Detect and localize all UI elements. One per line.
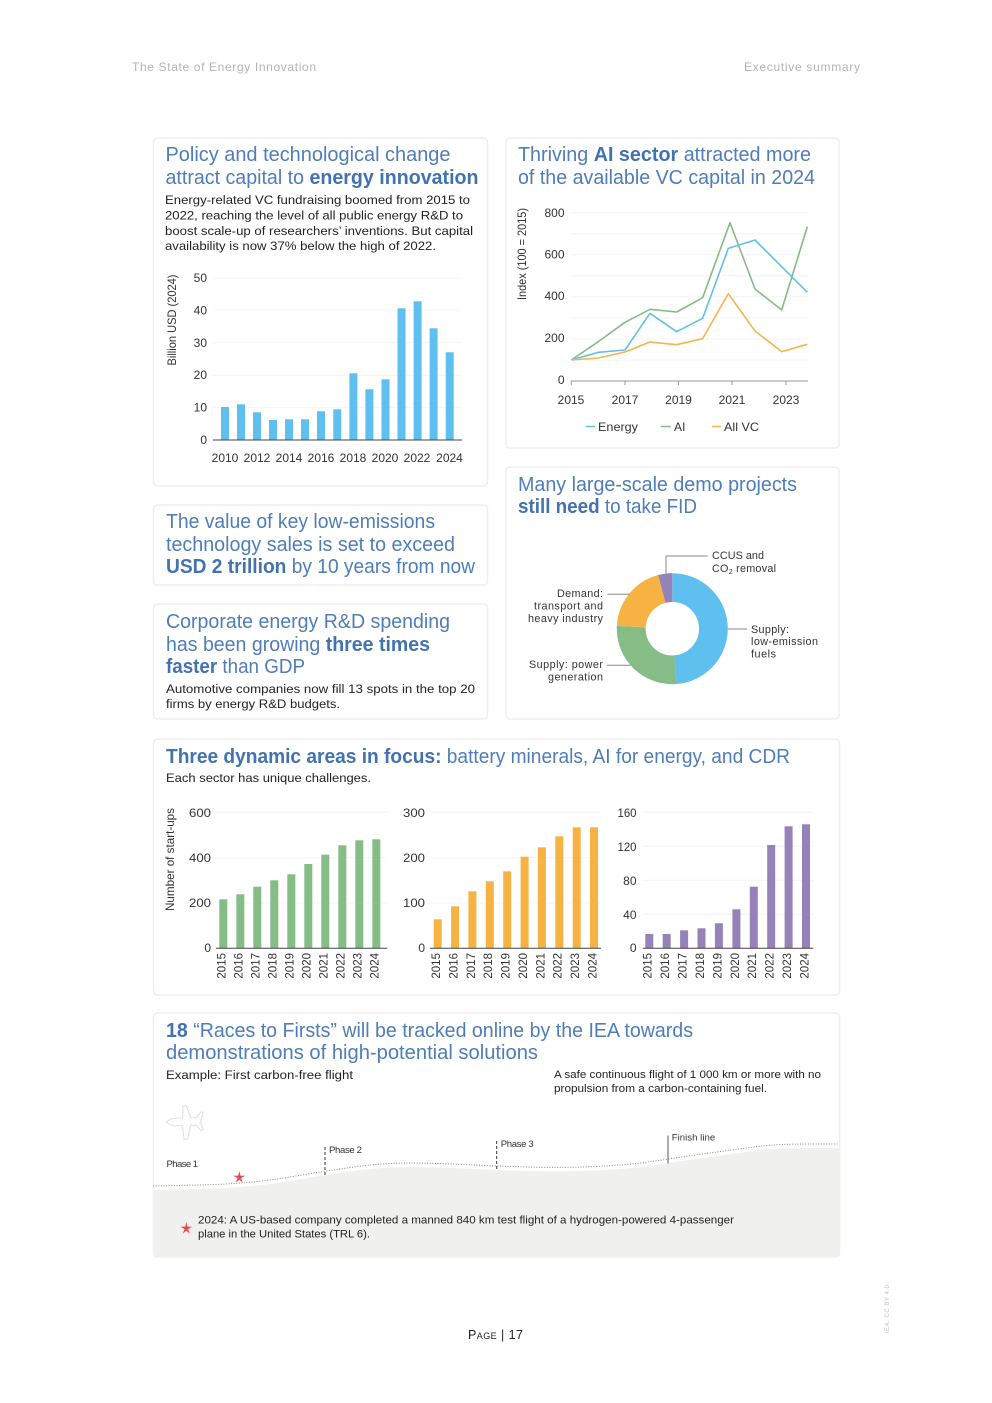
text block: VC fundraising summary: boost scale-up of researchers’ inventions. But capital bbox=[165, 224, 473, 238]
bar chart: energy VC funding: 2020 bbox=[372, 451, 399, 465]
label: supply low-emission fuels: low-emission bbox=[751, 636, 818, 648]
panel: three dynamic areas bbox=[154, 739, 840, 995]
bar chart: energy VC funding: 2014 bbox=[276, 451, 303, 465]
bar chart: energy VC funding: 2010 bbox=[212, 451, 239, 465]
bar chart: energy VC funding: 20 bbox=[194, 368, 207, 382]
bar chart: energy VC funding: 40 bbox=[194, 304, 207, 318]
heading: corporate energy R&D: faster than GDP bbox=[166, 656, 305, 678]
bar chart: battery minerals start-ups: 2018 bbox=[268, 953, 280, 979]
text block: sector challenges: Each sector has unique challenges. bbox=[166, 771, 371, 785]
line chart: VC index: 800 bbox=[544, 206, 565, 220]
panel: races to firsts bbox=[153, 1013, 840, 1257]
line chart: VC index bbox=[515, 206, 808, 434]
marker: finish line bbox=[668, 1133, 715, 1164]
heading: thriving AI sector: of the available VC capital in 2024 bbox=[518, 167, 815, 189]
bar chart: energy VC funding: 50 bbox=[194, 271, 207, 285]
bar chart: AI for energy start-ups: 2017 bbox=[466, 953, 478, 979]
terrain track bbox=[153, 1148, 840, 1257]
bar chart: battery minerals start-ups: 2016 bbox=[234, 953, 246, 979]
bar chart: CDR start-ups: 2015 bbox=[643, 953, 655, 979]
licence note: IEA. CC BY 4.0. bbox=[885, 1283, 891, 1333]
heading: three dynamic areas: Three dynamic areas in focus: battery minerals, AI for energy, and CDR bbox=[166, 746, 790, 768]
chart legend: Energy bbox=[598, 420, 638, 434]
bar chart: energy VC funding bbox=[165, 271, 463, 465]
bar chart: CDR start-ups: 2022 bbox=[765, 953, 777, 979]
label: CCUS and CO2 removal: CCUS and bbox=[712, 550, 764, 562]
page header left: The State of Energy Innovation bbox=[132, 60, 316, 74]
heading: corporate energy R&D: Corporate energy R&D spending bbox=[166, 611, 450, 633]
bar chart: battery minerals start-ups: 200 bbox=[189, 896, 211, 910]
line chart: VC index: 200 bbox=[544, 331, 565, 345]
heading: policy and technological change: attract capital to energy innovation bbox=[166, 167, 478, 189]
bar chart: energy VC funding: 30 bbox=[194, 336, 207, 350]
bar chart: battery minerals start-ups: 2022 bbox=[336, 953, 348, 979]
dotted flight path bbox=[153, 1144, 838, 1186]
label: CCUS and CO2 removal: CO bbox=[712, 563, 728, 575]
heading: thriving AI sector bbox=[518, 144, 815, 189]
bar chart: AI for energy start-ups: 300 bbox=[403, 806, 425, 820]
heading: large-scale demo projects bbox=[518, 474, 797, 518]
bar chart: battery minerals start-ups bbox=[189, 806, 387, 979]
bar chart: battery minerals start-ups: 2015 bbox=[217, 953, 229, 979]
bar chart: energy VC funding: Billion USD (2024) bbox=[165, 274, 179, 366]
bar chart: CDR start-ups: 2019 bbox=[712, 953, 724, 979]
bar chart: AI for energy start-ups: 200 bbox=[403, 851, 425, 865]
heading: large-scale demo projects: still need to take FID bbox=[518, 496, 697, 518]
bar chart: energy VC funding: 10 bbox=[194, 400, 207, 414]
text block: automotive companies bbox=[166, 682, 475, 711]
label: CCUS and CO2 removal: 2 bbox=[729, 569, 733, 576]
heading: policy and technological change bbox=[166, 144, 478, 189]
text block: 2024 test flight bbox=[198, 1214, 734, 1241]
page header right: Executive summary bbox=[744, 60, 860, 74]
heading: policy and technological change: Policy and technological change bbox=[166, 144, 450, 166]
marker: phase 2 bbox=[325, 1145, 362, 1175]
text block: VC fundraising summary bbox=[165, 193, 473, 253]
text block: VC fundraising summary: Energy-related VC fundraising boomed from 2015 to bbox=[165, 193, 470, 207]
bar chart: CDR start-ups bbox=[618, 806, 813, 979]
donut chart: demo projects by sector bbox=[528, 550, 818, 684]
label: demand bbox=[528, 588, 604, 625]
bar chart: CDR start-ups: 40 bbox=[623, 908, 637, 922]
bar chart: energy VC funding: 2012 bbox=[244, 451, 271, 465]
icon: star legend bbox=[180, 1222, 192, 1234]
text block: flight definition bbox=[554, 1069, 821, 1095]
bar chart: CDR start-ups: 2024 bbox=[799, 952, 811, 979]
axis label: number of start-ups: Number of start-ups bbox=[163, 808, 177, 911]
line chart: VC index: 2021 bbox=[719, 393, 746, 407]
bar chart: energy VC funding: 2018 bbox=[340, 451, 367, 465]
line chart: VC index: Index (100 = 2015) bbox=[515, 208, 529, 300]
label: supply low-emission fuels: fuels bbox=[751, 648, 777, 660]
bar chart: AI for energy start-ups: 100 bbox=[403, 896, 425, 910]
line chart: VC index: 600 bbox=[544, 248, 565, 262]
bar chart: CDR start-ups: 2021 bbox=[747, 953, 759, 979]
heading: low-emissions technology sales bbox=[166, 511, 476, 578]
icon: star on track bbox=[233, 1171, 245, 1183]
label: demand: Demand: bbox=[557, 588, 603, 600]
label: CCUS and CO2 removal bbox=[712, 550, 776, 576]
panel: AI sector VC bbox=[506, 138, 839, 448]
heading: low-emissions technology sales: The value of key low-emissions bbox=[166, 511, 435, 533]
marker: phase 2: Phase 2 bbox=[329, 1145, 362, 1156]
bar chart: CDR start-ups: 2016 bbox=[660, 953, 672, 979]
bar chart: battery minerals start-ups: 2024 bbox=[370, 952, 382, 979]
bar chart: AI for energy start-ups: 2022 bbox=[553, 953, 565, 979]
heading: thriving AI sector: Thriving AI sector attracted more bbox=[518, 144, 811, 166]
icon: plane bbox=[166, 1106, 203, 1140]
marker: phase 1: Phase 1 bbox=[166, 1159, 198, 1170]
bar chart: AI for energy start-ups: 2023 bbox=[570, 953, 582, 979]
bar chart: battery minerals start-ups: 0 bbox=[204, 941, 211, 955]
bar chart: energy VC funding: 2022 bbox=[404, 451, 431, 465]
bar chart: CDR start-ups: 0 bbox=[630, 941, 637, 955]
text block: automotive companies: Automotive companies now fill 13 spots in the top 20 bbox=[166, 682, 475, 696]
text block: VC fundraising summary: availability is now 37% below the high of 2022. bbox=[165, 239, 436, 253]
line chart: VC index: 2017 bbox=[612, 393, 639, 407]
label: demand: heavy industry bbox=[528, 613, 604, 625]
text block: flight definition: propulsion from a carbon-containing fuel. bbox=[554, 1083, 767, 1095]
label: demand: transport and bbox=[534, 600, 603, 612]
label: supply low-emission fuels: Supply: bbox=[751, 624, 789, 636]
bar chart: energy VC funding: 2016 bbox=[308, 451, 335, 465]
bar chart: AI for energy start-ups: 2021 bbox=[535, 953, 547, 979]
bar chart: CDR start-ups: 2020 bbox=[730, 953, 742, 979]
label: CCUS and CO2 removal: removal bbox=[733, 563, 776, 575]
text block: 2024 test flight: 2024: A US-based company completed a manned 840 km test flight of a hydrogen-powered 4-passenger bbox=[198, 1214, 734, 1226]
bar chart: AI for energy start-ups: 2016 bbox=[448, 953, 460, 979]
panel: technology sales bbox=[154, 505, 488, 585]
bar chart: CDR start-ups: 80 bbox=[623, 874, 637, 888]
bar chart: battery minerals start-ups: 2017 bbox=[251, 953, 263, 979]
heading: races to firsts: demonstrations of high-potential solutions bbox=[166, 1042, 538, 1064]
panel: corporate R&D bbox=[154, 604, 488, 719]
bar chart: CDR start-ups: 2023 bbox=[782, 953, 794, 979]
marker: phase 3 bbox=[497, 1139, 534, 1170]
bar chart: battery minerals start-ups: 2020 bbox=[302, 953, 314, 979]
bar chart: energy VC funding: 2024 bbox=[436, 451, 463, 465]
heading: low-emissions technology sales: USD 2 trillion by 10 years from now bbox=[166, 556, 476, 578]
bar chart: battery minerals start-ups: 2023 bbox=[353, 953, 365, 979]
text block: flight definition: A safe continuous flight of 1 000 km or more with no bbox=[554, 1069, 821, 1081]
text block: example: Example: First carbon-free flight bbox=[166, 1068, 354, 1082]
bar chart: battery minerals start-ups: 600 bbox=[189, 806, 211, 820]
chart legend: All VC bbox=[724, 420, 759, 434]
heading: corporate energy R&D bbox=[166, 611, 450, 678]
bar chart: AI for energy start-ups: 2019 bbox=[501, 953, 513, 979]
label: supply power generation bbox=[529, 659, 603, 684]
bar chart: AI for energy start-ups bbox=[403, 806, 601, 979]
line chart: VC index: 2019 bbox=[665, 393, 692, 407]
chart legend: AI bbox=[674, 420, 686, 434]
bar chart: AI for energy start-ups: 2024 bbox=[587, 952, 599, 979]
text block: VC fundraising summary: 2022, reaching the level of all public energy R&D to bbox=[165, 208, 463, 222]
heading: low-emissions technology sales: technology sales is set to exceed bbox=[166, 534, 455, 556]
bar chart: battery minerals start-ups: 2019 bbox=[285, 953, 297, 979]
line chart: VC index: 400 bbox=[544, 289, 565, 303]
line chart: VC index: 2023 bbox=[773, 393, 800, 407]
bar chart: CDR start-ups: 160 bbox=[618, 806, 637, 820]
heading: races to firsts bbox=[166, 1020, 693, 1064]
label: supply power generation: generation bbox=[548, 672, 603, 684]
panel: demo projects bbox=[506, 467, 839, 719]
label: supply power generation: Supply: power bbox=[529, 659, 603, 671]
bar chart: CDR start-ups: 2018 bbox=[695, 953, 707, 979]
bar chart: energy VC funding: 0 bbox=[200, 433, 207, 447]
heading: large-scale demo projects: Many large-scale demo projects bbox=[518, 474, 797, 496]
panel: VC fundraising bbox=[154, 138, 488, 486]
line chart: VC index: 0 bbox=[558, 373, 565, 387]
chart legend bbox=[586, 420, 759, 434]
bar chart: AI for energy start-ups: 2020 bbox=[518, 953, 530, 979]
marker: finish line: Finish line bbox=[672, 1133, 715, 1144]
bar chart: AI for energy start-ups: 0 bbox=[418, 941, 425, 955]
bar chart: battery minerals start-ups: 400 bbox=[189, 851, 211, 865]
bar chart: CDR start-ups: 120 bbox=[618, 840, 637, 854]
line chart: VC index: 2015 bbox=[558, 393, 585, 407]
text block: automotive companies: firms by energy R&D budgets. bbox=[166, 697, 340, 711]
bar chart: CDR start-ups: 2017 bbox=[677, 953, 689, 979]
label: supply low-emission fuels bbox=[751, 624, 818, 660]
heading: races to firsts: 18 “Races to Firsts” will be tracked online by the IEA towards bbox=[166, 1020, 693, 1042]
page number: Page | 17 bbox=[468, 1328, 523, 1342]
bar chart: AI for energy start-ups: 2015 bbox=[431, 953, 443, 979]
bar chart: AI for energy start-ups: 2018 bbox=[483, 953, 495, 979]
heading: corporate energy R&D: has been growing three times bbox=[166, 634, 430, 656]
text block: 2024 test flight: plane in the United States (TRL 6). bbox=[198, 1229, 370, 1241]
bar chart: battery minerals start-ups: 2021 bbox=[319, 953, 331, 979]
marker: phase 3: Phase 3 bbox=[501, 1139, 534, 1150]
